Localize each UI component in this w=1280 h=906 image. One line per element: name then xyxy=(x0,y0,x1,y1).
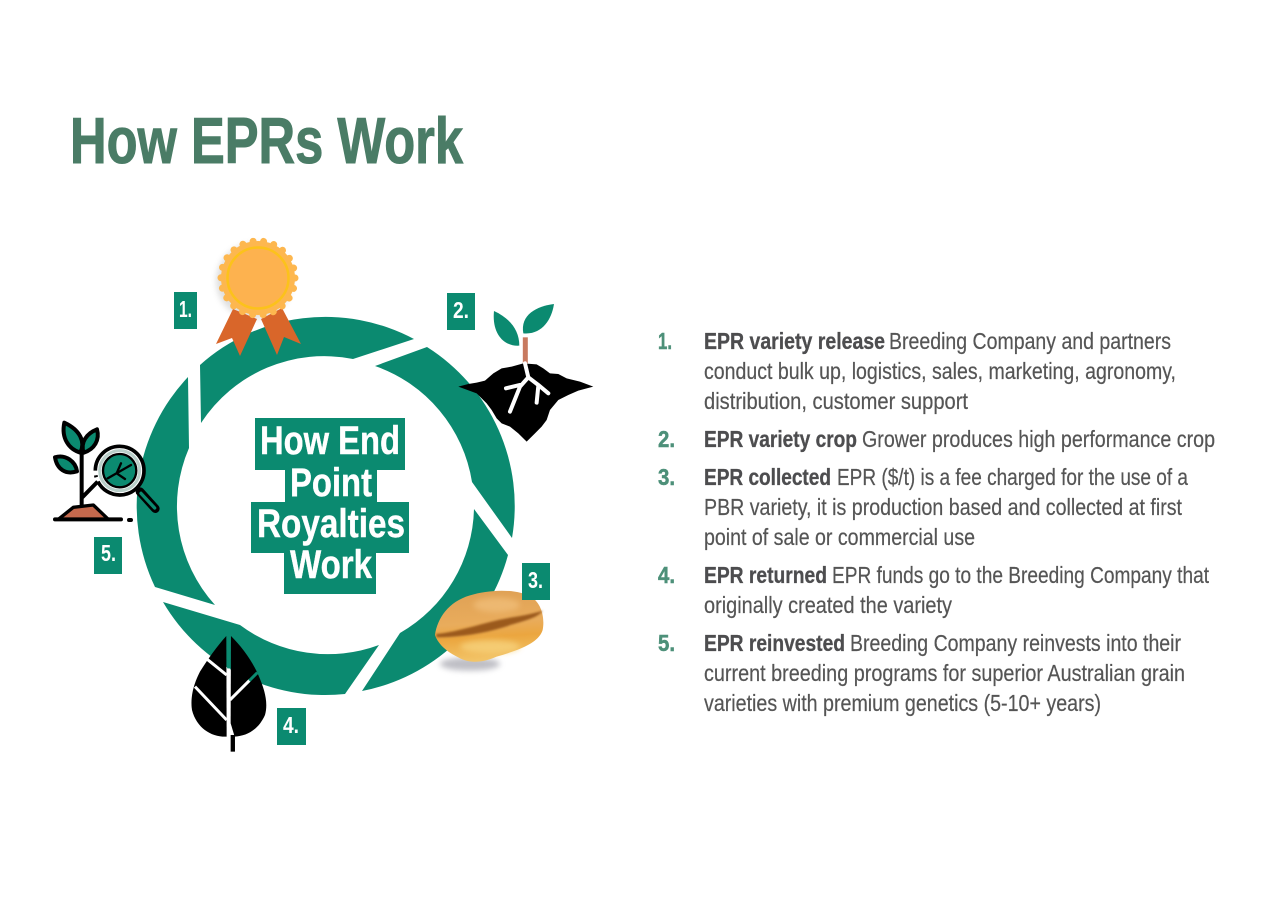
step label 5: 5. xyxy=(101,540,116,566)
icon: seedling in soil xyxy=(458,304,593,442)
list item 3: PBR variety, it is production based and collected at first xyxy=(704,494,1183,520)
ring segment 3 xyxy=(362,509,508,691)
list item 3: point of sale or commercial use xyxy=(704,524,975,550)
step label 3: 3. xyxy=(528,567,543,593)
ring segment 2 xyxy=(375,347,515,538)
list item 2: Grower produces high performance crop xyxy=(862,426,1215,452)
list item 5: 5. xyxy=(658,630,675,656)
icon: wheat grain xyxy=(435,591,543,671)
step label 4: 4. xyxy=(283,712,299,738)
ring segment 1 xyxy=(200,317,414,423)
icon: medal xyxy=(216,241,301,356)
icon: leaf xyxy=(191,635,266,752)
center label: Royalties xyxy=(257,502,405,546)
list item 3: EPR collected xyxy=(704,464,831,490)
list item 3: EPR ($/t) is a fee charged for the use of a xyxy=(837,464,1188,490)
list item 1: EPR variety release xyxy=(704,328,885,354)
list item 4: EPR returned xyxy=(704,562,827,588)
list item 5: varieties with premium genetics (5-10+ years) xyxy=(704,690,1101,716)
icon: plant and magnifying glass xyxy=(55,423,155,520)
center label: How End xyxy=(260,419,400,463)
list item 1: Breeding Company and partners xyxy=(889,328,1171,354)
title: How EPRs Work xyxy=(70,104,464,177)
list item 2: 2. xyxy=(658,426,675,452)
list item 5 xyxy=(658,630,1185,716)
step label 4 xyxy=(277,708,306,745)
ring segment 4 xyxy=(163,602,379,695)
list item 4: EPR funds go to the Breeding Company that xyxy=(832,562,1210,588)
ring segment 5 xyxy=(137,377,215,605)
list item 2: EPR variety crop xyxy=(704,426,857,452)
step label 1: 1. xyxy=(179,296,192,322)
step label 2 xyxy=(447,293,475,330)
list item 3 xyxy=(658,464,1188,550)
list item 4: originally created the variety xyxy=(704,592,952,618)
list item 5: Breeding Company reinvests into their xyxy=(850,630,1181,656)
list item 2 xyxy=(658,426,1215,452)
step label 5 xyxy=(94,537,122,574)
step label 3 xyxy=(522,563,550,600)
list item 4 xyxy=(658,562,1210,618)
list item 5: current breeding programs for superior Australian grain xyxy=(704,660,1185,686)
list item 1: distribution, customer support xyxy=(704,388,969,414)
cycle diagram xyxy=(55,241,593,752)
numbered list xyxy=(658,328,1215,716)
list item 5: EPR reinvested xyxy=(704,630,845,656)
center label: Point xyxy=(290,461,372,505)
list item 3: 3. xyxy=(658,464,675,490)
list item 1: 1. xyxy=(658,328,672,354)
step label 1 xyxy=(174,292,197,329)
list item 4: 4. xyxy=(658,562,675,588)
center label xyxy=(251,418,409,594)
list item 1 xyxy=(658,328,1176,414)
center label: Work xyxy=(290,543,373,587)
step label 2: 2. xyxy=(453,297,469,323)
list item 1: conduct bulk up, logistics, sales, marketing, agronomy, xyxy=(704,358,1176,384)
